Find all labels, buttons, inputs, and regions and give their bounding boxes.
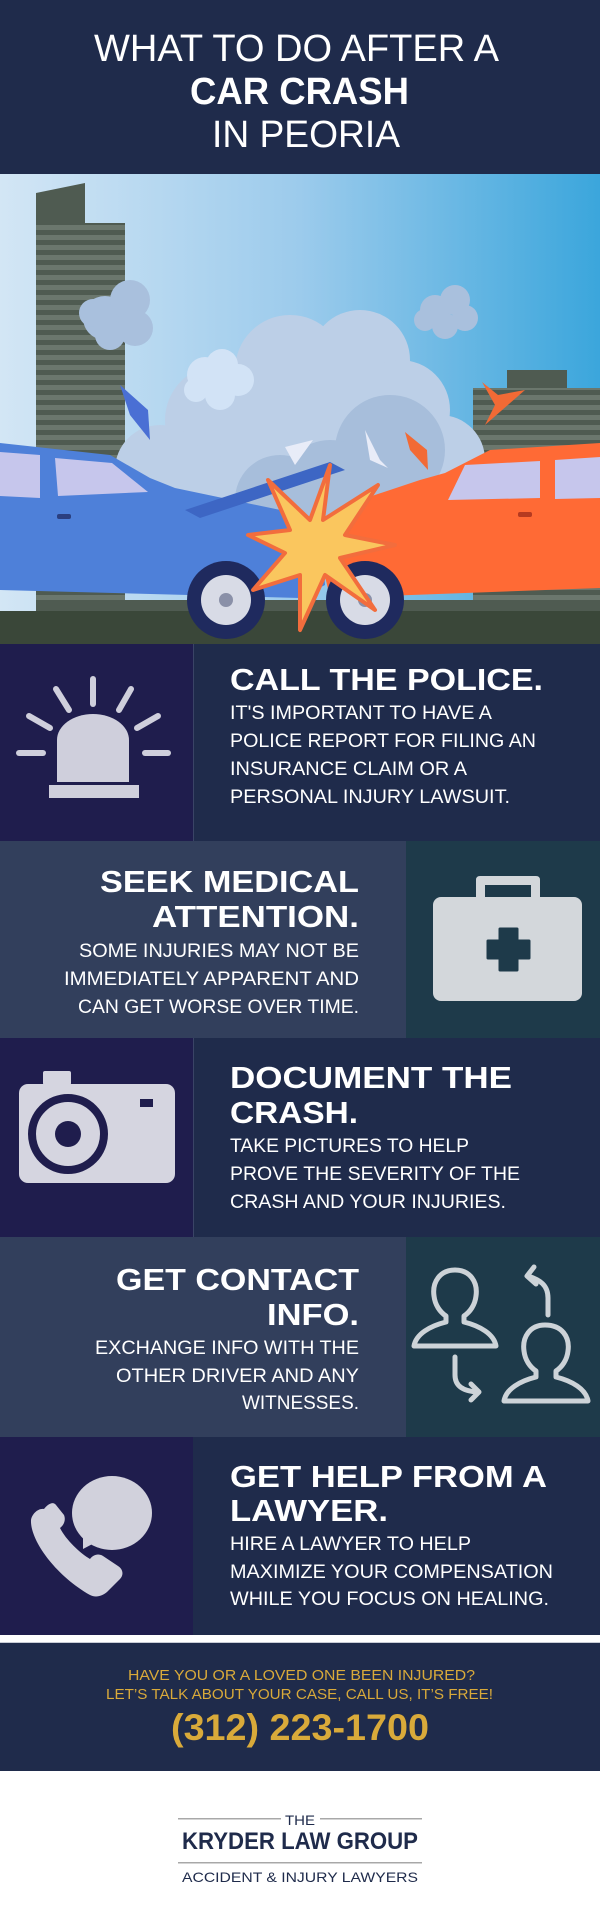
- text block: HIRE A LAWYER TO HELP: [230, 1534, 471, 1555]
- icon: medical kit: [433, 876, 582, 1001]
- panel: get contact info: [0, 1237, 600, 1437]
- text block: [230, 1136, 520, 1213]
- icon: siren: [19, 679, 168, 798]
- text block: POLICE REPORT FOR FILING AN: [230, 731, 536, 752]
- text block: CAN GET WORSE OVER TIME.: [78, 997, 359, 1018]
- text block: PROVE THE SEVERITY OF THE: [230, 1164, 520, 1185]
- icon: exchange contacts: [414, 1267, 588, 1401]
- title: [94, 28, 500, 156]
- callout: call to action: (312) 223-1700: [171, 1707, 429, 1748]
- clouds: [79, 280, 485, 545]
- text block: IT'S IMPORTANT TO HAVE A: [230, 703, 492, 724]
- text block: OTHER DRIVER AND ANY: [116, 1366, 359, 1387]
- orange car: [318, 443, 600, 639]
- text block: EXCHANGE INFO WITH THE: [95, 1338, 359, 1359]
- heading: ATTENTION.: [152, 899, 359, 934]
- heading: SEEK MEDICAL: [100, 864, 359, 899]
- heading: INFO.: [267, 1297, 359, 1332]
- heading: [116, 1262, 359, 1332]
- text block: PERSONAL INJURY LAWSUIT.: [230, 787, 510, 808]
- text block: SOME INJURIES MAY NOT BE: [79, 941, 359, 962]
- logo: KRYDER LAW GROUP: [182, 1828, 418, 1855]
- heading: [100, 864, 359, 934]
- callout: call to action: [0, 1643, 600, 1771]
- text block: [230, 1534, 553, 1610]
- title: WHAT TO DO AFTER A: [94, 28, 500, 70]
- heading: [230, 1060, 512, 1130]
- heading: CRASH.: [230, 1095, 358, 1130]
- panel: document the crash: [0, 1038, 600, 1237]
- heading: GET HELP FROM A: [230, 1459, 547, 1494]
- title: IN PEORIA: [212, 114, 401, 156]
- logo: [178, 1812, 422, 1885]
- text block: MAXIMIZE YOUR COMPENSATION: [230, 1562, 553, 1583]
- icon: camera: [19, 1071, 175, 1183]
- right building: [473, 370, 600, 603]
- text block: TAKE PICTURES TO HELP: [230, 1136, 469, 1157]
- panel: call the police: [0, 644, 600, 841]
- title: CAR CRASH: [190, 71, 409, 113]
- icon: phone and speech bubble: [31, 1476, 152, 1596]
- callout: call to action: HAVE YOU OR A LOVED ONE BEEN INJURED?: [128, 1667, 475, 1684]
- text block: CRASH AND YOUR INJURIES.: [230, 1192, 506, 1213]
- hero illustration: car crash: [0, 174, 600, 644]
- heading: LAWYER.: [230, 1493, 388, 1528]
- blue car: [0, 443, 345, 639]
- callout: call to action: LET’S TALK ABOUT YOUR CASE, CALL US, IT’S FREE!: [106, 1686, 493, 1703]
- logo: ACCIDENT & INJURY LAWYERS: [182, 1869, 418, 1885]
- debris: [120, 382, 525, 470]
- heading: CALL THE POLICE.: [230, 662, 543, 697]
- text block: [95, 1338, 359, 1414]
- logo: THE: [285, 1812, 315, 1828]
- left building: [36, 183, 125, 603]
- heading: DOCUMENT THE: [230, 1060, 512, 1095]
- text block: INSURANCE CLAIM OR A: [230, 759, 467, 780]
- text block: WHILE YOU FOCUS ON HEALING.: [230, 1589, 549, 1610]
- panel: seek medical attention: [0, 841, 600, 1038]
- panel: get help from a lawyer: [0, 1437, 600, 1635]
- text block: [64, 941, 359, 1018]
- explosion: [248, 465, 395, 630]
- heading: GET CONTACT: [116, 1262, 359, 1297]
- header: [0, 0, 600, 174]
- heading: [230, 1459, 547, 1528]
- text block: IMMEDIATELY APPARENT AND: [64, 969, 359, 990]
- ground: [0, 611, 600, 644]
- text block: WITNESSES.: [242, 1393, 359, 1414]
- text block: [230, 703, 536, 808]
